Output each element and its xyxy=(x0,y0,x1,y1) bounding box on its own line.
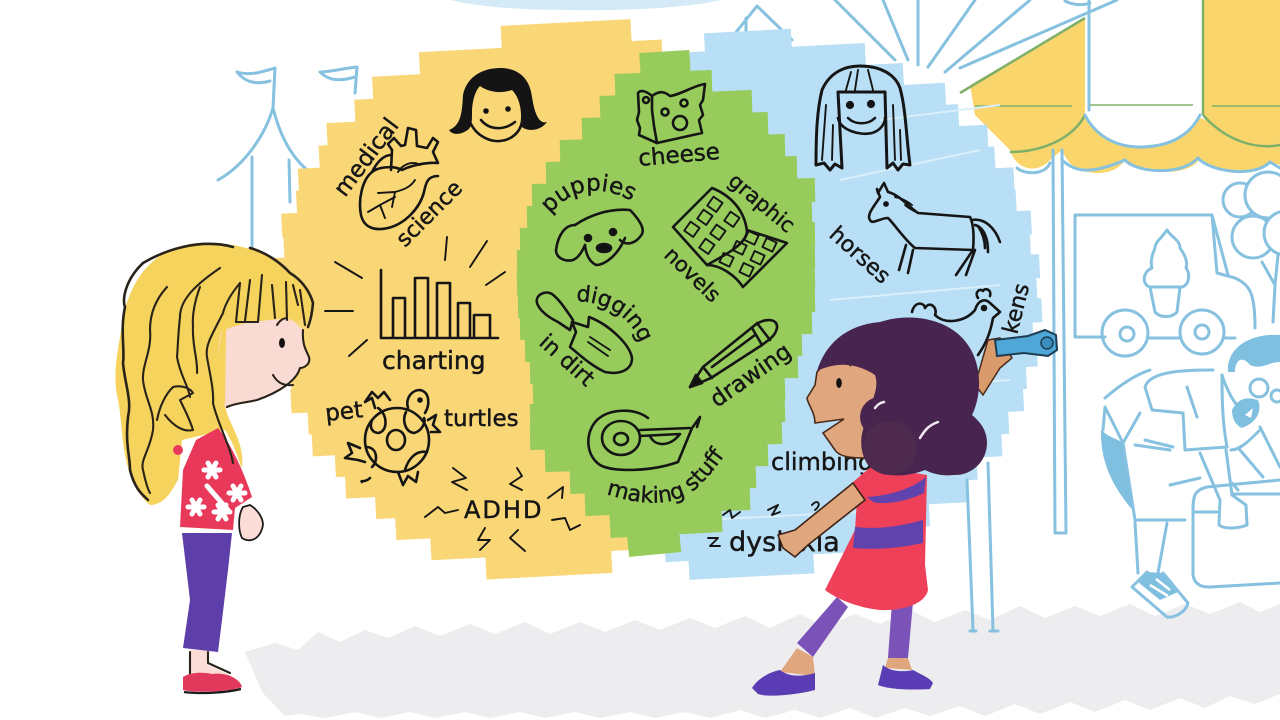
shirt xyxy=(180,428,252,530)
hand xyxy=(239,505,263,540)
label: science: science xyxy=(392,176,468,252)
vendor figure xyxy=(1101,335,1280,617)
icon: heart xyxy=(360,128,438,229)
icon: cheese xyxy=(637,84,705,143)
label: cheese: cheese xyxy=(637,139,721,172)
face lines xyxy=(227,318,309,407)
icon: tape dispenser xyxy=(588,411,700,470)
chart: bar chart with rays xyxy=(325,237,505,356)
panel: right girl's interests xyxy=(708,66,1035,558)
dress xyxy=(825,466,928,610)
right leg xyxy=(888,602,913,658)
front hair xyxy=(218,262,313,405)
shoe xyxy=(183,673,242,692)
panel: green overlap xyxy=(517,62,815,545)
yellow awning xyxy=(960,0,1280,173)
icon: ADHD squiggles xyxy=(425,468,580,551)
label: dyslexia: dyslexia xyxy=(729,527,840,558)
hair fill xyxy=(115,243,313,505)
icon: horse xyxy=(869,183,1000,275)
background fair scene xyxy=(218,0,1280,617)
rays and rooftop xyxy=(733,0,1117,110)
label: horses: horses xyxy=(824,222,895,289)
panel: shared interests xyxy=(534,82,800,504)
icon: dyslexia squiggles xyxy=(708,502,819,546)
balloons xyxy=(1223,172,1280,322)
stall poles xyxy=(1053,150,1066,533)
face xyxy=(219,318,309,408)
label: in dirt: in dirt xyxy=(534,330,599,392)
icon: puppy xyxy=(556,210,643,265)
poles in front of blue circle xyxy=(967,463,998,631)
icon: flashlight xyxy=(995,330,1057,356)
label: making stuff: making stuff xyxy=(608,444,723,504)
legs and ankle xyxy=(190,650,232,680)
red flower on hair xyxy=(173,445,183,455)
label: chickens (partly hidden): kens xyxy=(999,281,1035,336)
face xyxy=(807,345,890,458)
label: medical: medical xyxy=(329,114,404,202)
icon: girl face with long hair xyxy=(816,66,910,170)
icon: chicken xyxy=(912,289,1000,355)
label: drawing: drawing xyxy=(706,339,796,413)
label: graphic: graphic xyxy=(724,168,800,238)
raised arm xyxy=(975,338,1012,395)
dress stripes xyxy=(853,477,926,549)
left leg xyxy=(797,597,848,657)
trousers xyxy=(182,533,232,652)
hair strands xyxy=(123,244,313,500)
panel: blue circle xyxy=(639,28,1054,569)
ground shadow xyxy=(245,602,1280,718)
label: digging: digging xyxy=(578,284,651,342)
icon: pencil xyxy=(690,320,777,387)
label: pet: pet xyxy=(324,397,364,427)
label: ADHD: ADHD xyxy=(464,496,543,524)
figure: left girl xyxy=(115,243,313,693)
panel: left girl's interests xyxy=(324,68,580,551)
icon: trowel xyxy=(537,293,632,373)
label: climbing: climbing xyxy=(771,448,873,476)
icon: turtle xyxy=(345,390,440,485)
ice cream truck xyxy=(1075,215,1255,356)
vendor shoe xyxy=(1138,572,1178,600)
tent flags xyxy=(218,67,357,252)
pointing arm xyxy=(778,483,865,557)
panel: yellow circle xyxy=(259,30,689,578)
shoes xyxy=(752,670,815,696)
figure: right girl xyxy=(752,317,1057,696)
faint roof at top edge xyxy=(450,0,720,10)
blue marker streaks xyxy=(700,105,1010,520)
icon: graphic novel xyxy=(673,188,787,287)
label: charting: charting xyxy=(382,346,486,375)
label: turtles: turtles xyxy=(444,406,519,432)
hair xyxy=(817,317,984,475)
shirt flowers xyxy=(188,463,245,519)
icon: girl face with bob xyxy=(449,68,547,141)
label: novels: novels xyxy=(660,242,725,307)
label: puppies: puppies xyxy=(542,174,636,216)
